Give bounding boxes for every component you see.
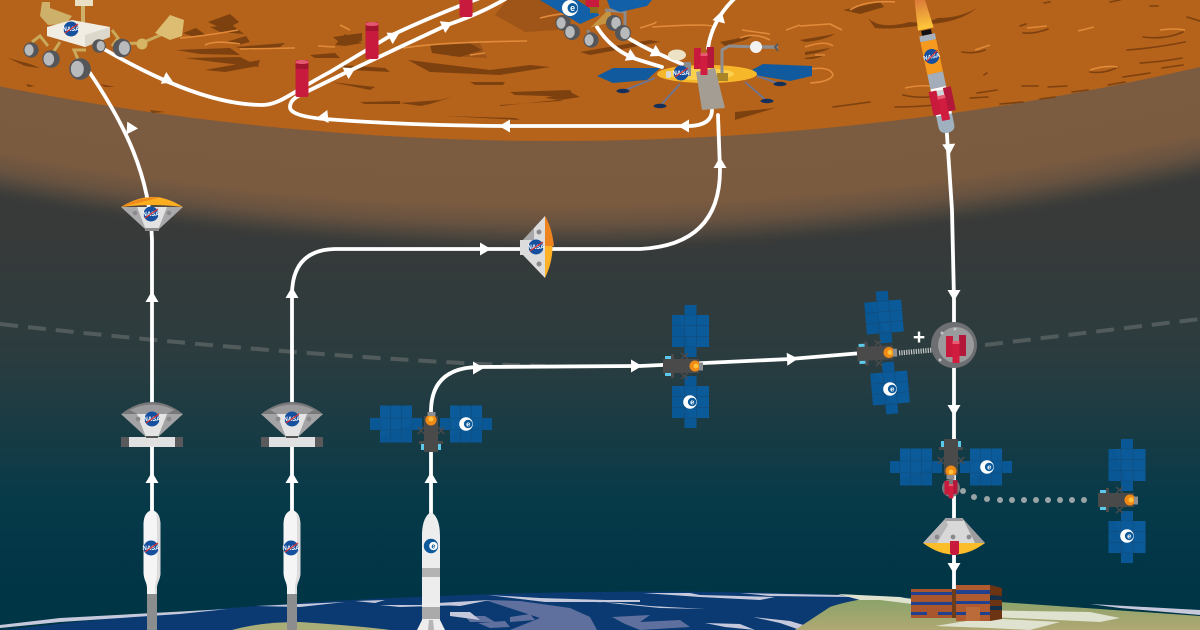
entry capsule: rover descent — [121, 197, 183, 231]
ESA logo — [883, 382, 897, 396]
Mars: large shaded basins — [435, 0, 600, 58]
ESA logo — [683, 395, 697, 409]
Earth: right landmass — [795, 597, 1200, 630]
Mars sample lander — [597, 41, 812, 110]
NASA logo — [143, 412, 161, 426]
Mars: thin crater shadows — [833, 0, 1200, 107]
sample tubes on lander — [694, 47, 714, 75]
NASA logo — [527, 240, 545, 254]
Earth: ocean shallows and clouds — [465, 600, 690, 630]
flight paths: white trajectories — [90, 0, 954, 600]
ESA orbiter departing — [1098, 439, 1146, 563]
NASA logo — [282, 540, 300, 556]
sample tubes on Mars surface — [296, 0, 598, 97]
NASA rover — [23, 0, 184, 80]
ESA logo on rover — [562, 0, 578, 16]
ESA logo — [980, 460, 994, 474]
ESA rocket: orbiter launch — [417, 512, 445, 630]
ESA fetch rover — [540, 0, 652, 48]
NASA logo — [142, 540, 160, 556]
sample tubes in vehicle — [928, 86, 957, 123]
ESA orbiter at launch — [370, 406, 492, 452]
Earth: left landmass — [232, 622, 390, 630]
NASA logo on vehicle — [922, 47, 942, 66]
ESA logo — [459, 417, 473, 431]
orbiting sample container — [931, 322, 977, 368]
Mars atmosphere glow — [0, 0, 1200, 260]
Mars: highlight crater rims — [180, 2, 1185, 88]
cruise stage capsule: lander — [261, 402, 323, 447]
receiving facility building — [911, 585, 1002, 621]
Earth surface — [0, 592, 1200, 630]
orbit: dashed Mars orbit line — [0, 319, 1200, 366]
Earth entry capsule — [923, 518, 985, 555]
cruise stage capsule: rover — [121, 402, 183, 447]
Mars ascent vehicle — [909, 0, 960, 135]
lander ramp — [696, 68, 725, 110]
ESA orbiter cruising — [663, 305, 709, 428]
Mars surface — [0, 0, 1200, 141]
ESA orbiter with captured container — [890, 439, 1012, 498]
direction arrows — [121, 10, 961, 574]
NASA logo on lander — [672, 66, 690, 80]
NASA logo — [283, 412, 301, 426]
Mars: dark terrain marks — [8, 2, 977, 120]
NASA rocket: lander launch — [282, 510, 300, 630]
sample tubes — [946, 335, 966, 363]
ESA orbiter capturing sample container — [856, 289, 933, 416]
entry capsule: lander descent — [520, 216, 554, 278]
NASA logo on rover — [62, 22, 80, 36]
ESA logo — [1120, 529, 1134, 543]
NASA logo — [142, 206, 160, 222]
NASA rocket: rover launch — [142, 510, 160, 630]
dotted departure track — [960, 488, 1087, 503]
ESA logo — [424, 539, 438, 553]
plus sign: + — [913, 326, 925, 349]
